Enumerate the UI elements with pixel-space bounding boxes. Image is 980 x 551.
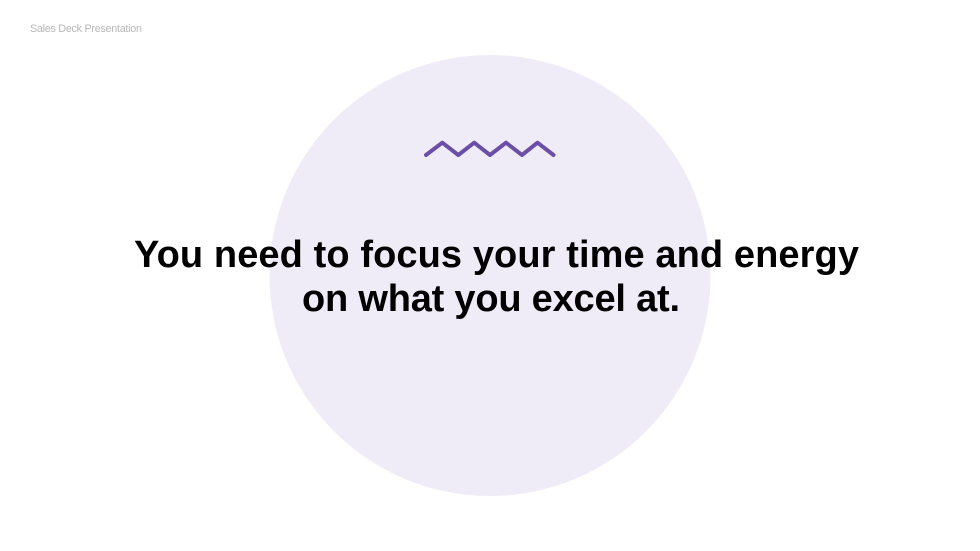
background circle — [270, 55, 710, 496]
main quote: on what you excel at. — [302, 278, 680, 320]
main quote — [134, 234, 859, 320]
main quote: You need to focus your time and energy — [134, 234, 859, 276]
header label: Sales Deck Presentation — [30, 23, 142, 35]
icon: zigzag line — [426, 143, 554, 155]
